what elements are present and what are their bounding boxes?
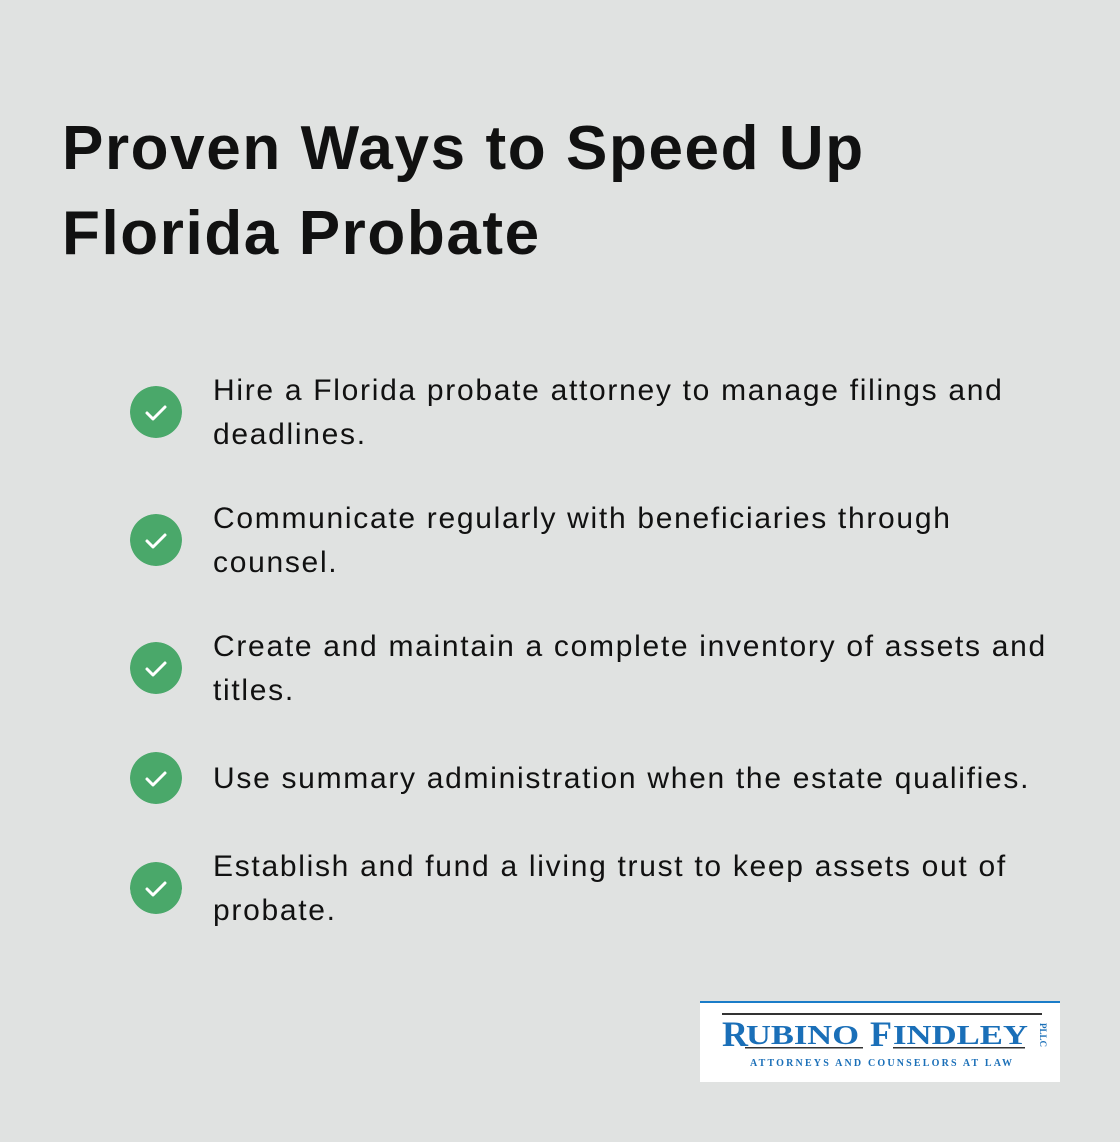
icon: check — [130, 752, 182, 804]
text: Hire a Florida probate attorney to manage filings and deadlines. — [213, 374, 1004, 451]
text: Communicate regularly with beneficiaries through counsel. — [213, 502, 952, 579]
logo: F — [870, 1014, 892, 1054]
logo: ATTORNEYS AND COUNSELORS AT LAW — [750, 1058, 1012, 1069]
icon: check — [130, 862, 182, 914]
logo: UBINO — [746, 1020, 859, 1050]
item 3 — [130, 630, 1047, 707]
title: Proven Ways to Speed Up — [62, 114, 865, 183]
logo: R — [722, 1014, 749, 1054]
logo: INDLEY — [893, 1020, 1028, 1050]
logo — [700, 1001, 1060, 1082]
title — [62, 114, 865, 268]
item 5 — [130, 850, 1007, 927]
icon: check — [130, 386, 182, 438]
logo: PLLC — [1038, 1023, 1048, 1047]
item 2 — [130, 502, 952, 579]
text: Use summary administration when the estate qualifies. — [213, 762, 1030, 795]
icon: check — [130, 642, 182, 694]
text: Establish and fund a living trust to keep assets out of probate. — [213, 850, 1007, 927]
title: Florida Probate — [62, 199, 541, 268]
icon: check — [130, 514, 182, 566]
item 1 — [130, 374, 1004, 451]
item 4 — [130, 752, 1030, 804]
text: Create and maintain a complete inventory of assets and titles. — [213, 630, 1047, 707]
